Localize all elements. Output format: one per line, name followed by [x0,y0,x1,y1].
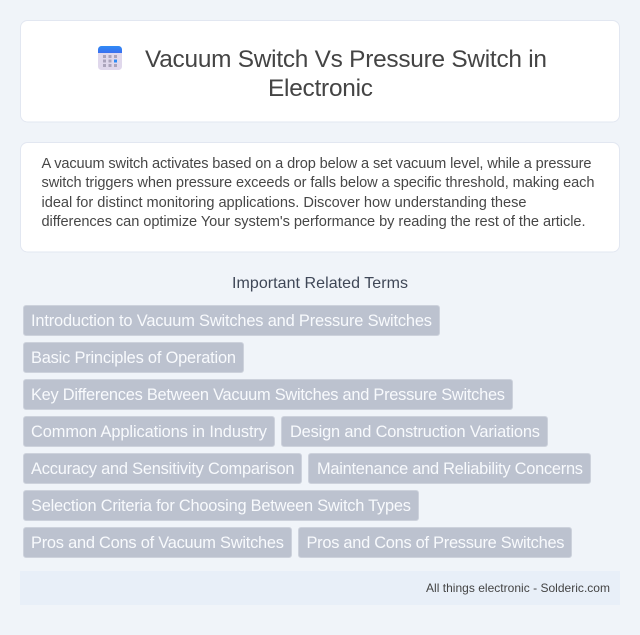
intro paragraph [42,156,594,230]
chip: selection criteria: Selection Criteria for Choosing Between Switch Types [31,497,411,515]
chip: key differences [24,380,512,410]
chip: pros and cons pressure: Pros and Cons of Pressure Switches [306,534,564,552]
intro paragraph: switch triggers when pressure exceeds or falls below a specific threshold, making each [42,175,594,191]
icon: calendar [98,46,122,70]
footer: All things electronic - Solderic.com [426,581,610,595]
chip: accuracy [24,454,302,484]
chip: maintenance: Maintenance and Reliability Concerns [317,460,583,478]
title: Electronic [268,75,373,102]
panel: term chips [24,306,590,558]
chip: pros and cons vacuum [24,528,292,558]
intro paragraph: A vacuum switch activates based on a drop below a set vacuum level, while a pressure [42,156,592,172]
chip: basic principles [24,342,244,372]
chip: maintenance [308,454,590,484]
chip: design and construction [282,416,548,446]
intro paragraph: differences can optimize Your system's performance by reading the rest of the article. [42,214,586,230]
footer [20,571,620,605]
chip: introduction [24,306,440,336]
chip: accuracy: Accuracy and Sensitivity Comparison [31,460,294,478]
chip: introduction: Introduction to Vacuum Switches and Pressure Switches [31,312,432,330]
heading: related terms: Important Related Terms [232,275,408,292]
panel: intro text card [20,142,620,252]
chip: key differences: Key Differences Between Vacuum Switches and Pressure Switches [31,386,505,404]
chip: pros and cons vacuum: Pros and Cons of Vacuum Switches [31,534,284,552]
chip: design and construction: Design and Construction Variations [290,423,540,441]
chip: selection criteria [24,490,418,520]
panel: title card [20,20,620,122]
title: Vacuum Switch Vs Pressure Switch in [145,46,547,73]
chip: basic principles: Basic Principles of Operation [31,349,236,367]
chip: pros and cons pressure [298,528,572,558]
title [145,46,547,102]
chip: common applications [24,416,274,446]
intro paragraph: ideal for distinct monitoring applications. Discover how understanding these [42,195,526,211]
chip: common applications: Common Applications in Industry [31,423,268,441]
